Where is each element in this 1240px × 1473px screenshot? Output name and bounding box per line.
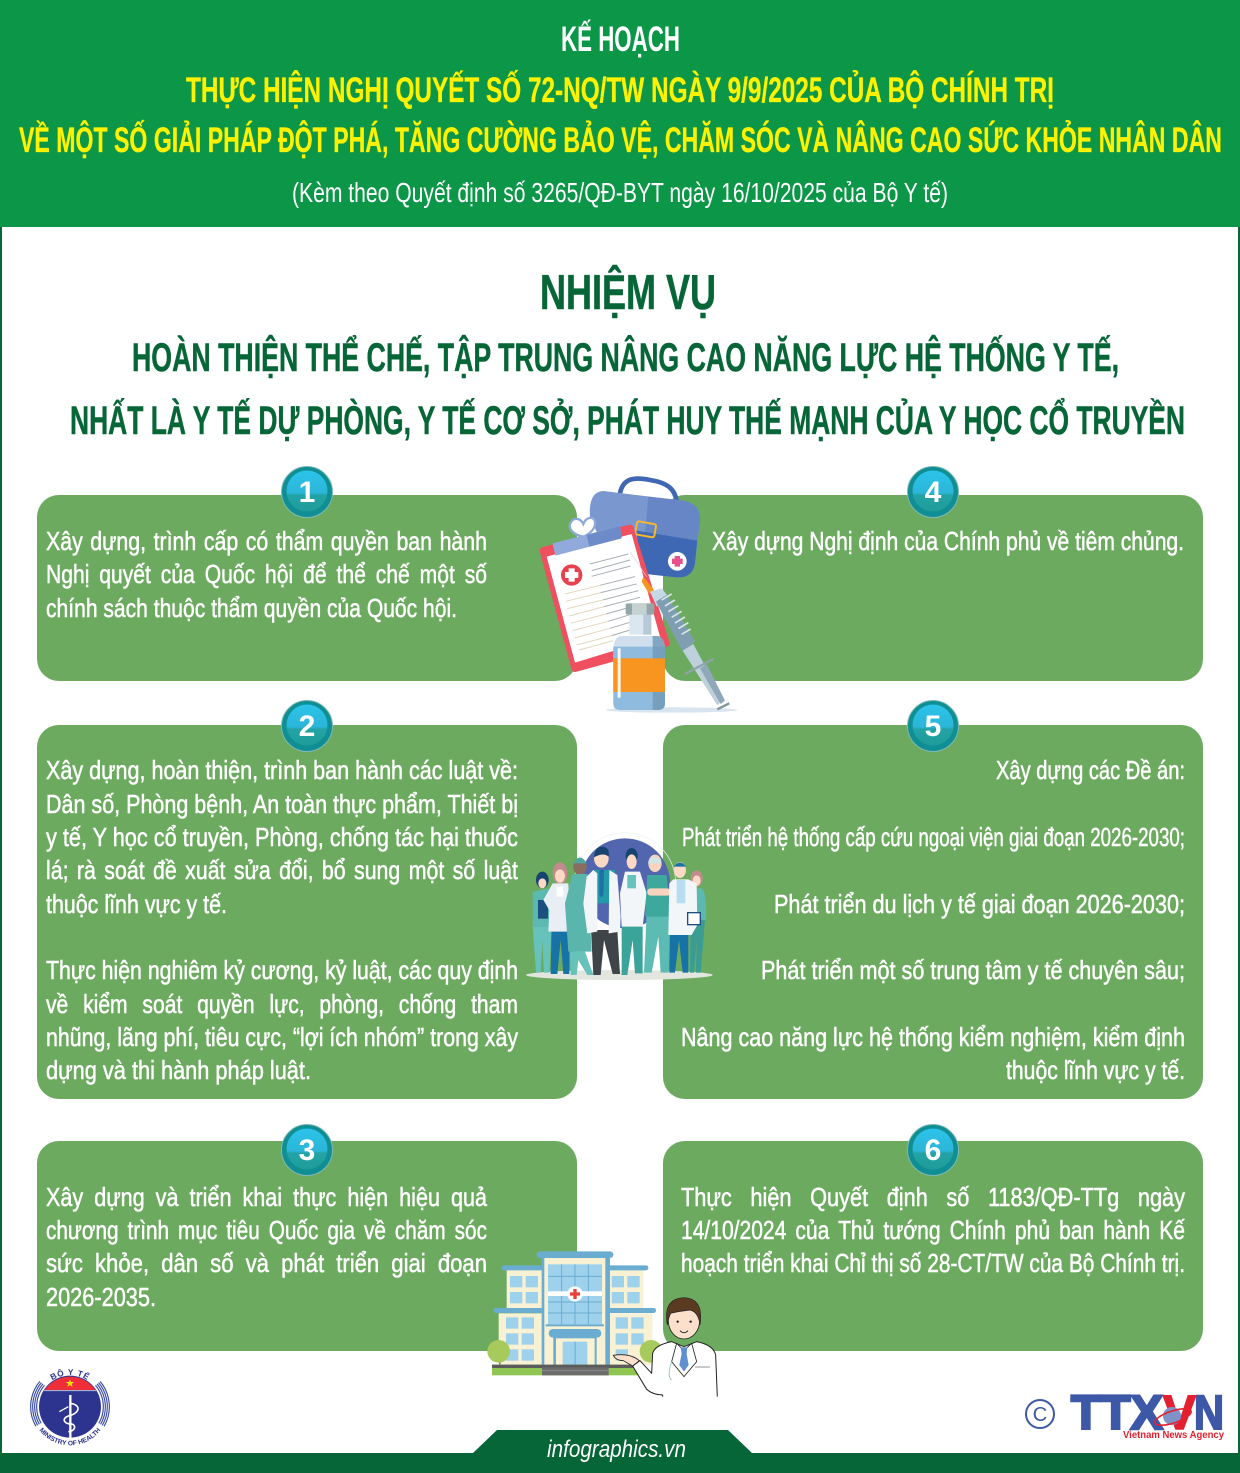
illustration: hospital building bbox=[487, 1251, 662, 1375]
panel 2: Xây dựng, hoàn thiện, trình ban hành các luật về: bbox=[46, 755, 518, 785]
badge 6: 6 bbox=[925, 1134, 941, 1167]
panel 3: Xây dựng và triển khai thực hiện hiệu quả bbox=[46, 1182, 487, 1212]
illustration: medical team bbox=[526, 833, 713, 980]
badge 5: 5 bbox=[925, 710, 941, 743]
badge 4 bbox=[908, 466, 958, 518]
footer band: infographics.vn bbox=[547, 1436, 686, 1463]
panel 4 bbox=[663, 495, 1203, 681]
badge 2: 2 bbox=[299, 710, 315, 743]
panel 5: Xây dựng các Đề án: bbox=[996, 755, 1185, 785]
badge 3: 3 bbox=[299, 1134, 315, 1167]
logo: TTXVN: Vietnam News Agency bbox=[1123, 1430, 1224, 1441]
logo: Bộ Y tế bbox=[30, 1369, 110, 1446]
header banner: KẾ HOẠCH bbox=[561, 19, 680, 59]
figure: man in lab coat bbox=[583, 847, 621, 975]
figure: woman doctor arms crossed bbox=[620, 848, 647, 975]
heading: nhiệm vụ: NHIỆM VỤ bbox=[540, 265, 716, 320]
panel 2: Thực hiện nghiêm kỷ cương, kỷ luật, các quy định bbox=[46, 955, 518, 985]
panel 2: thuộc lĩnh vực y tế. bbox=[46, 889, 227, 919]
logo: TTXVN: N bbox=[1194, 1387, 1224, 1440]
badge 1: 1 bbox=[299, 476, 315, 509]
logo: Bộ Y tế: BỘ Y TẾ bbox=[50, 1369, 90, 1380]
illustration: doctor presenting bbox=[613, 1298, 717, 1397]
badge 3 bbox=[282, 1124, 332, 1176]
panel 2: Dân số, Phòng bệnh, An toàn thực phẩm, Thiết bị bbox=[46, 789, 518, 819]
logo: TTXVN: V bbox=[1163, 1387, 1196, 1440]
panel 2: y tế, Y học cổ truyền, Phòng, chống tác hại thuốc bbox=[46, 822, 518, 852]
badge 2 bbox=[282, 700, 332, 752]
panel 2: về kiểm soát quyền lực, phòng, chống tham bbox=[46, 989, 518, 1019]
figure: far right nurse bbox=[690, 870, 706, 973]
logo: TTXVN: TTX bbox=[1071, 1387, 1163, 1440]
panel 2: nhũng, lãng phí, tiêu cực, “lợi ích nhóm” trong xây bbox=[46, 1022, 518, 1052]
badge 6 bbox=[908, 1124, 958, 1176]
panel 6 bbox=[663, 1141, 1203, 1351]
logo: TTXVN bbox=[1026, 1387, 1224, 1441]
figure: nurse far left bbox=[533, 872, 553, 973]
panel 1: chính sách thuộc thẩm quyền của Quốc hội. bbox=[46, 593, 457, 623]
panel 1: Xây dựng, trình cấp có thẩm quyền ban hành bbox=[46, 526, 487, 556]
figure: man with clipboard bbox=[668, 862, 700, 973]
panel 2 bbox=[37, 725, 577, 1099]
footer band bbox=[0, 1430, 1240, 1473]
figure: surgeon with mask bbox=[644, 855, 671, 973]
panel 2: dựng và thi hành pháp luật. bbox=[46, 1055, 311, 1085]
panel 1 bbox=[37, 495, 577, 681]
panel 2: lá; rà soát đề xuất sửa đổi, bổ sung một số luật bbox=[46, 855, 519, 885]
panel 3: sức khỏe, dân số và phát triển giai đoạn bbox=[46, 1248, 487, 1278]
heading: nhiệm vụ bbox=[70, 265, 1185, 443]
header banner: (Kèm theo Quyết định số 3265/QĐ-BYT ngày 16/10/2025 của Bộ Y tế) bbox=[292, 177, 948, 208]
panel 3: chương trình mục tiêu Quốc gia về chăm sóc bbox=[46, 1215, 487, 1245]
illustration: medical bag, clipboard, vial and syringe bbox=[543, 479, 737, 713]
header banner bbox=[0, 0, 1240, 227]
panel 5 bbox=[663, 725, 1203, 1099]
badge 1 bbox=[282, 466, 332, 518]
figure: woman in lab coat bbox=[543, 862, 571, 974]
badge 5 bbox=[908, 700, 958, 752]
logo: TTXVN: C bbox=[1033, 1404, 1047, 1426]
figure: surgeon back view bbox=[565, 857, 593, 975]
panel 3: 2026-2035. bbox=[46, 1282, 156, 1312]
panel 3 bbox=[37, 1141, 577, 1351]
panel 5: thuộc lĩnh vực y tế. bbox=[1006, 1055, 1185, 1085]
panel 1: Nghị quyết của Quốc hội để thể chế một số bbox=[46, 559, 487, 589]
badge 4: 4 bbox=[925, 476, 942, 509]
logo: Bộ Y tế: MINISTRY OF HEALTH bbox=[40, 1428, 100, 1446]
